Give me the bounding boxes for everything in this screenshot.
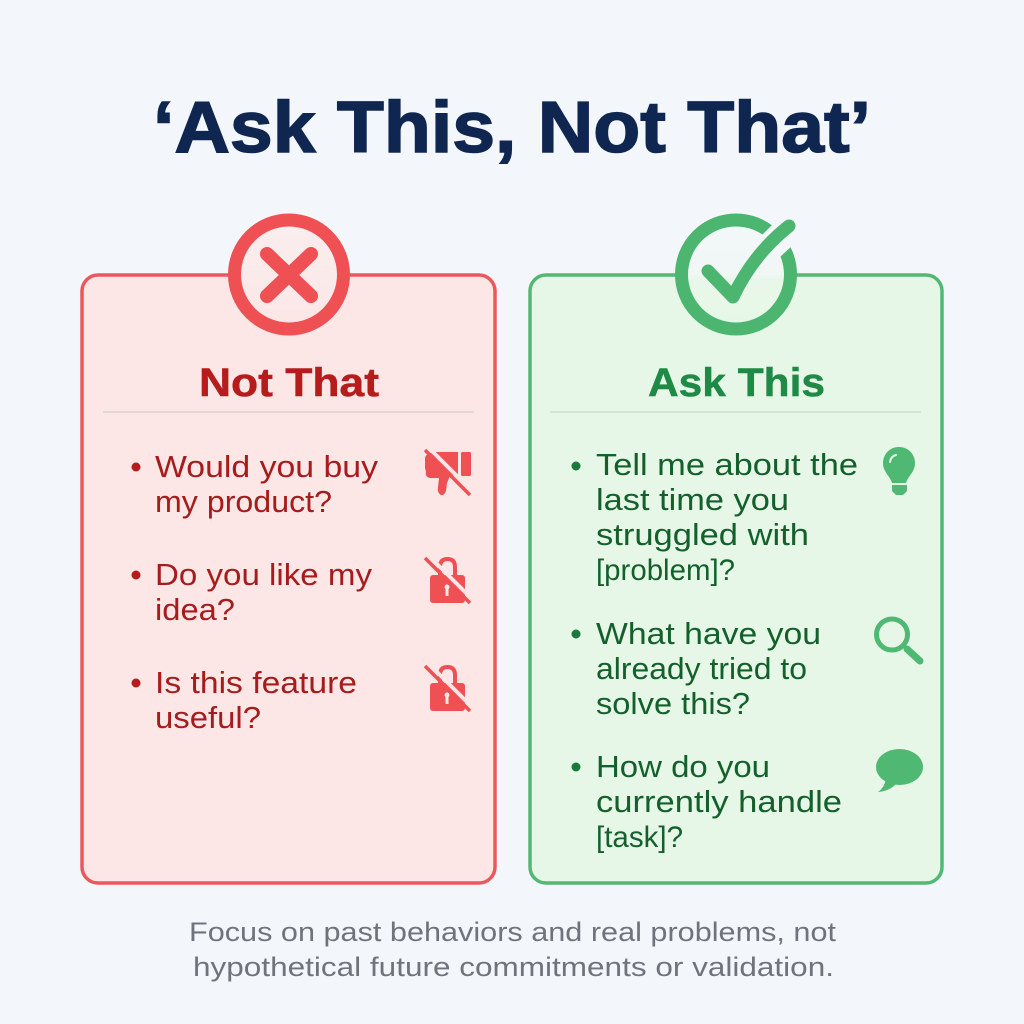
list item: like idea: idea? [155,592,235,627]
footer note: hypothetical future commitments or validation. [193,952,834,982]
footer note [189,917,837,982]
list item: handle task [572,749,842,854]
list item: feature useful [132,665,357,735]
icon: lightbulb [883,447,915,495]
list item: last time struggled: last time you [596,482,789,517]
list item: handle task: currently handle [596,784,842,819]
icon: thumbs down crossed [425,447,473,495]
icon: lock crossed [425,555,473,603]
list item: feature useful: useful? [155,700,261,735]
list item: tried to solve [572,616,821,721]
list item: like idea [132,557,373,627]
list item: last time struggled: Tell me about the [596,447,858,482]
heading: ask this: Ask This [648,361,825,405]
title: ‘Ask This, Not That’ [153,88,871,168]
list item: last time struggled: [problem]? [596,554,735,587]
list item: buy product: my product? [155,484,332,519]
icon: x in circle [234,220,344,329]
panel: ask this [530,220,942,883]
list item: tried to solve: What have you [596,616,821,651]
icon: magnifying glass [876,619,920,661]
list item: buy product: Would you buy [155,449,379,484]
icon: check in circle [682,220,795,329]
panel: not that [82,220,495,883]
list item: like idea: Do you like my [155,557,373,592]
list item: buy product [132,449,379,519]
list item: handle task: [task]? [596,821,683,854]
icon: lock crossed [425,663,473,711]
list item: handle task: How do you [596,749,770,784]
footer note: Focus on past behaviors and real problems, not [189,917,837,947]
list item: feature useful: Is this feature [155,665,357,700]
list item: last time struggled: struggled with [596,517,809,552]
list item: tried to solve: solve this? [596,686,750,721]
icon: speech bubble [876,749,923,792]
list item: tried to solve: already tried to [596,651,807,686]
list item: last time struggled [572,447,858,587]
heading: not that: Not That [199,361,379,405]
